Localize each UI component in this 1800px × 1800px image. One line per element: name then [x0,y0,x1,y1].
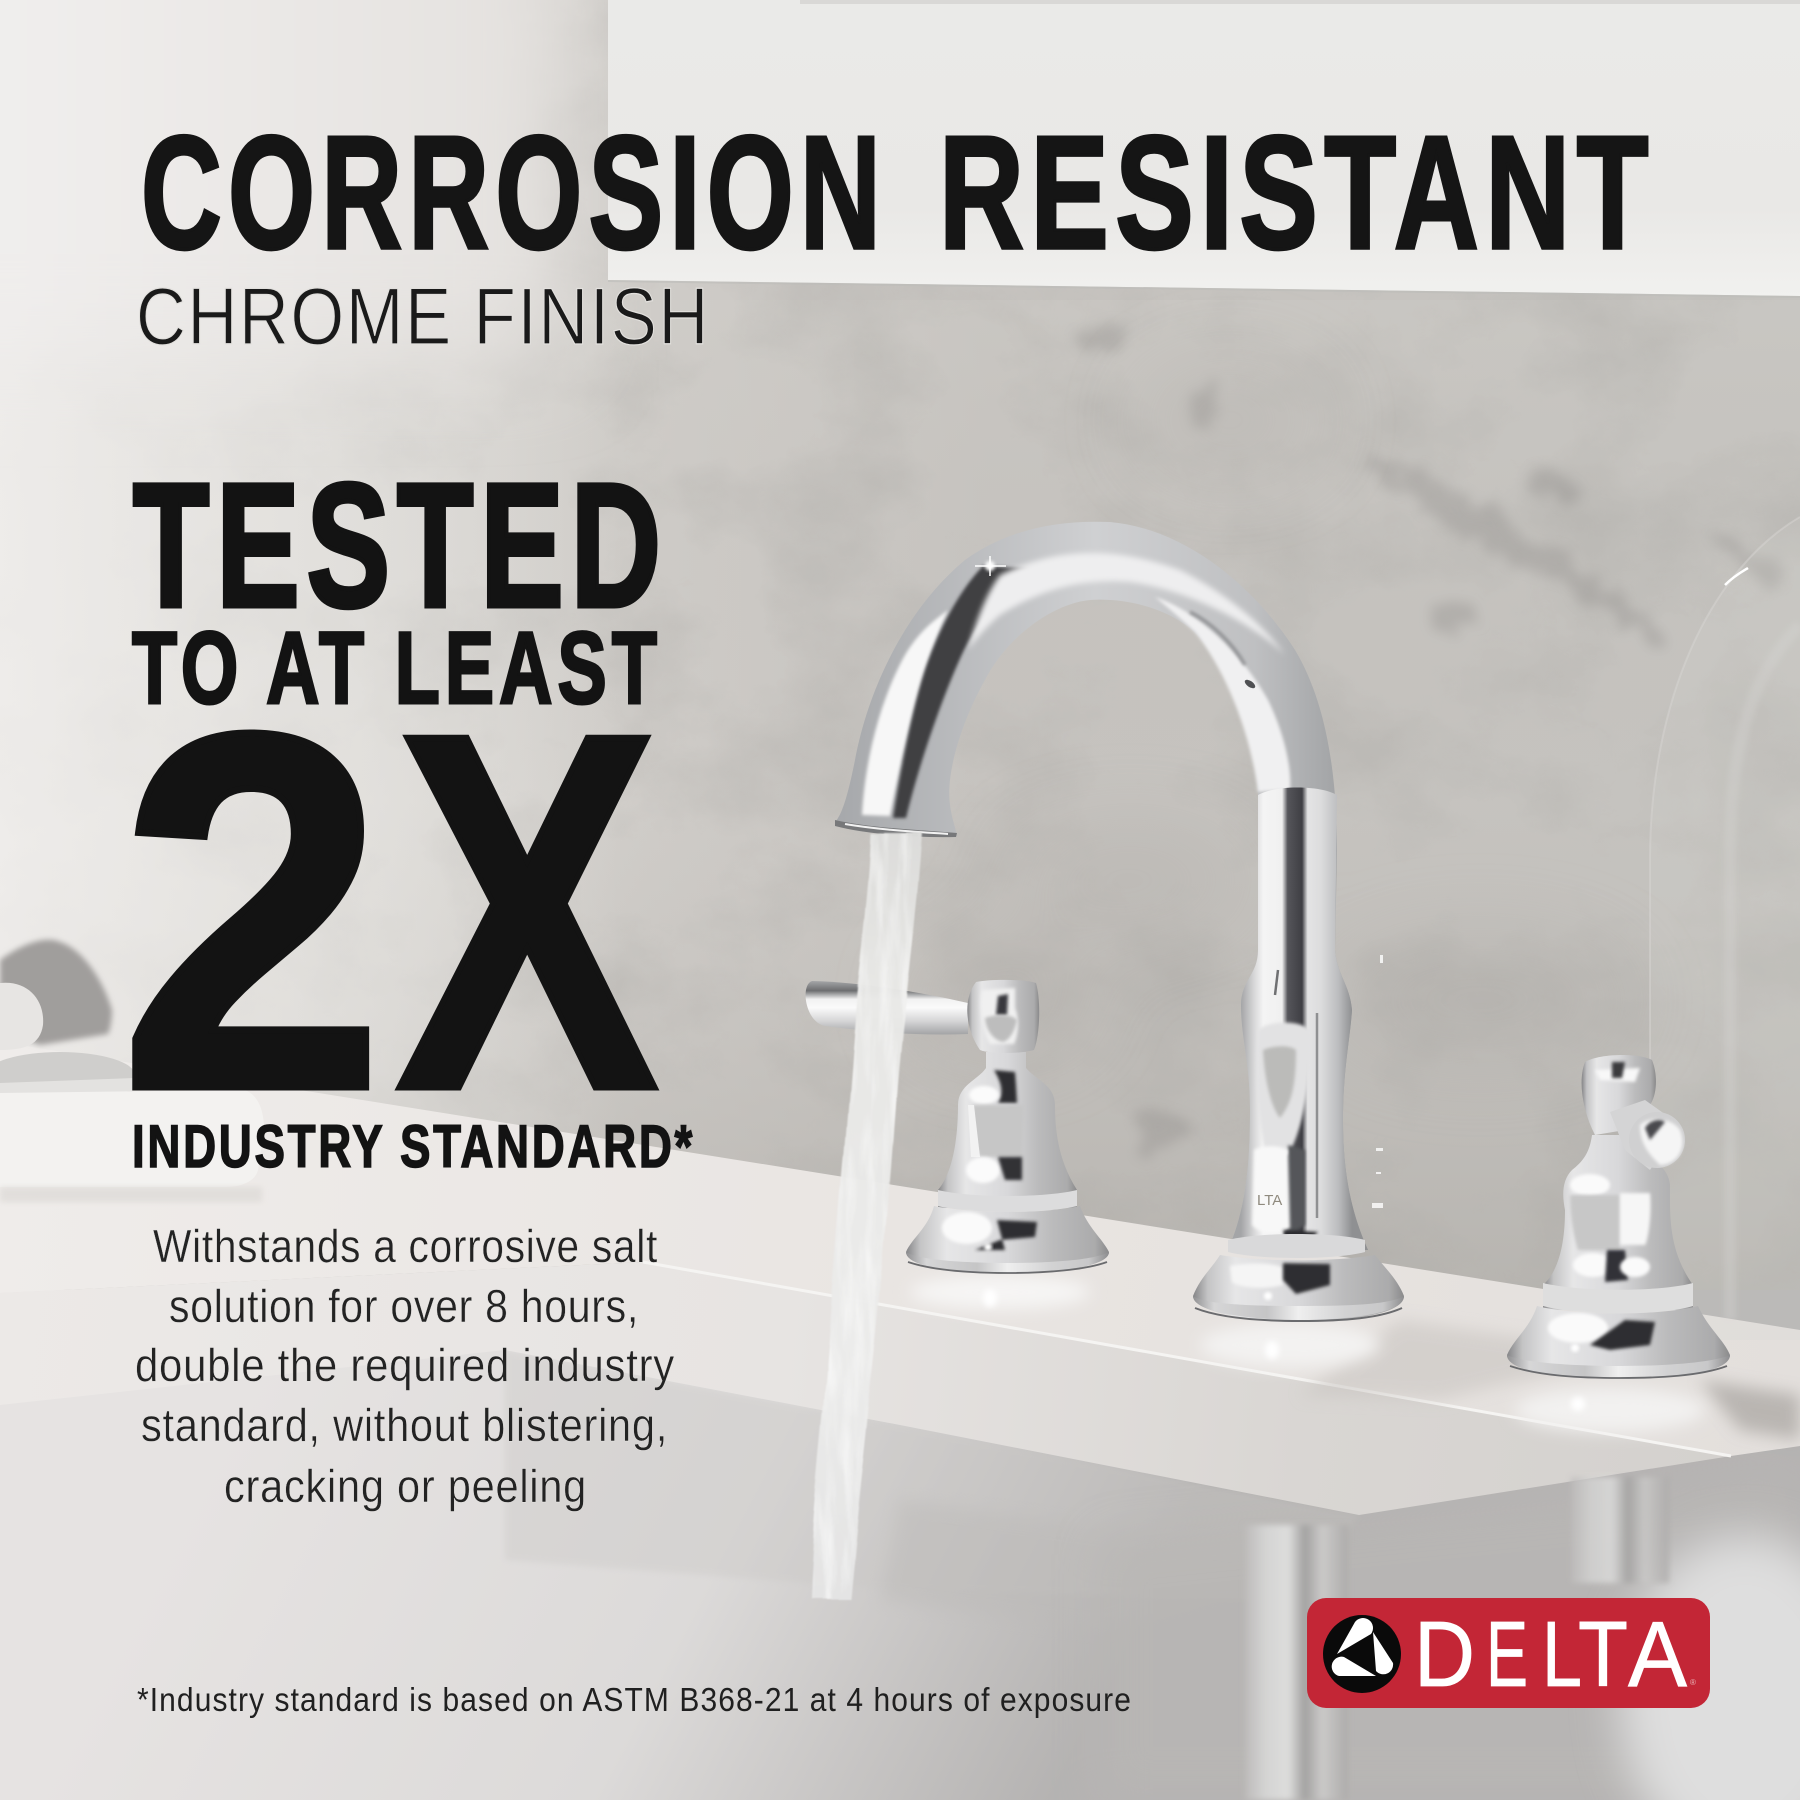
registered mark: ® [1690,1678,1696,1687]
chrome faucet spout: LTA [1257,1192,1282,1209]
spout sparkle [985,561,995,571]
counter shadows and reflections [910,1275,1800,1440]
title: CORROSION [141,103,887,283]
logo wordmark: L [1542,1602,1582,1706]
left collar [938,1190,1077,1212]
description paragraph: double the required industry [135,1339,675,1391]
description paragraph: cracking or peeling [224,1460,587,1512]
faucet base [1193,1255,1404,1321]
right cap [1582,1055,1656,1135]
spout white highlight [862,610,948,816]
faucet collar [1228,1234,1365,1258]
spout lip [835,820,957,837]
spout dark streak [893,566,1033,818]
spout inner reflection [1155,597,1290,792]
left neck and bell [938,1052,1077,1208]
footnote: *Industry standard is based on ASTM B368-21 at 4 hours of exposure [137,1681,1132,1718]
headline: tested to at least 2X industry standard: INDUSTRY STANDARD* [132,1113,695,1180]
right neck and bell [1543,1135,1693,1310]
subtitle: CHROME FINISH [136,272,710,362]
stem lens reflection [1257,1022,1310,1155]
left handle [806,980,1109,1273]
headline: tested to at least 2X industry standard: TO AT LEAST [132,611,662,725]
glass dome in background [1650,517,1800,1340]
description paragraph [135,1220,675,1512]
headline: tested to at least 2X industry standard [119,448,695,1195]
spout light band [968,553,1285,655]
description paragraph: Withstands a corrosive salt [153,1220,658,1272]
right handle [1507,1055,1730,1378]
headline: tested to at least 2X industry standard: X [396,629,660,1195]
faucet stem [1228,788,1368,1250]
right lever and knob [1610,1100,1680,1170]
logo wordmark: E [1486,1602,1528,1706]
sparkles on glass [1372,955,1383,1208]
left base [906,1206,1109,1273]
logo wordmark: A [1628,1602,1687,1706]
right collar [1543,1283,1693,1314]
left lever [806,981,968,1035]
headline: tested to at least 2X industry standard: 2 [119,629,385,1195]
description paragraph: standard, without blistering, [141,1399,668,1451]
logo wordmark: D [1414,1602,1475,1706]
Delta logo [1307,1598,1710,1708]
description paragraph: solution for over 8 hours, [169,1280,639,1332]
right base [1507,1306,1730,1378]
headline: tested to at least 2X industry standard: TESTED [133,448,668,644]
logo icon [1323,1615,1401,1693]
chrome faucet spout [835,522,1404,1321]
wall mirror panel [608,0,1800,298]
running water [809,832,922,1597]
counter and sink [0,1042,1800,1800]
logo wordmark: T [1578,1602,1628,1706]
shaving brush and tray [0,940,264,1202]
left cap [967,980,1039,1053]
